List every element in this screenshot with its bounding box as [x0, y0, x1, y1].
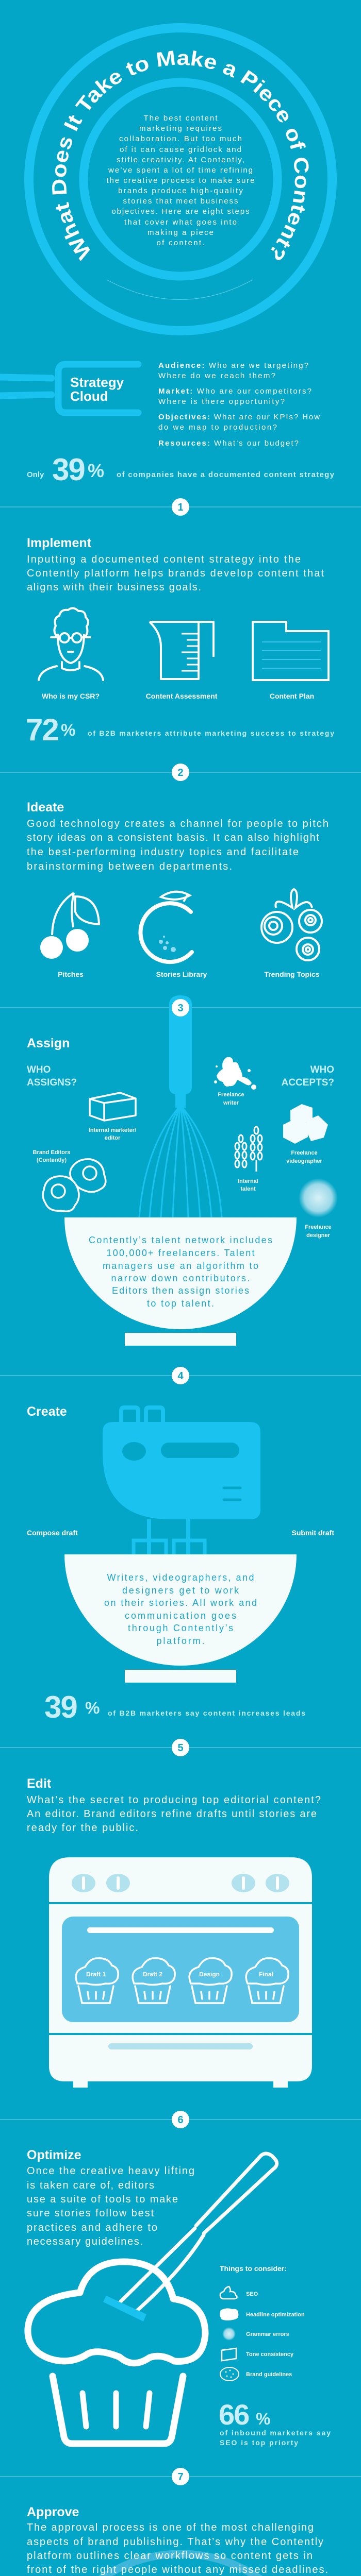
strategy questions: [158, 361, 320, 448]
icon: eggs (Brand Editors): (Contently): [37, 1157, 67, 1163]
ideate labels: [58, 970, 320, 978]
ideate labels: Stories Library: [156, 970, 207, 978]
create labels: Compose draft: [27, 1529, 78, 1537]
strategy questions: Market: Who are our competitors?: [158, 387, 311, 396]
strategy questions: Audience: Who are we targeting?: [158, 361, 308, 370]
intro text: stifle creativity. At Contently,: [117, 156, 244, 164]
ideate body: the best-performing industry topics and facilitate: [27, 846, 299, 858]
title rings: [29, 28, 332, 331]
stat: 39% leads: 39: [44, 1690, 77, 1724]
things to consider list: SEO: [246, 2291, 258, 2297]
stat: 72%: 72: [26, 713, 58, 747]
approve body: [27, 2522, 328, 2575]
strategy questions: do we map to production?: [158, 423, 277, 432]
approve body: aspects of brand publishing. That’s why the Contently: [27, 2536, 323, 2548]
step 6 marker: [0, 2111, 361, 2128]
whisk: [139, 995, 222, 1217]
text: Draft 2: [143, 1971, 162, 1978]
stat: 66%: %: [256, 2410, 270, 2428]
intro text: marketing requires: [139, 124, 222, 133]
text: Internal: [238, 1178, 258, 1184]
bowl: create: Writers, videographers, and: [107, 1572, 254, 1583]
bowl: talent network: to top talent.: [147, 1298, 214, 1309]
implement labels: Content Assessment: [146, 692, 218, 700]
step 1 marker: 1: [177, 502, 184, 513]
ideate body: brainstorming between departments.: [27, 861, 232, 872]
bowl: create: designers get to work: [122, 1585, 239, 1596]
create labels: [27, 1529, 334, 1537]
bowl: talent network: 100,000+ freelancers. Talent: [106, 1248, 255, 1258]
icon: splash (Freelance writer): [214, 1057, 256, 1090]
strategy cloud box: [0, 364, 138, 413]
heading: Edit: Edit: [27, 1776, 52, 1791]
edit body: ready for the public.: [27, 1822, 138, 1834]
step 7 marker: [0, 2468, 361, 2485]
icon: blueberries (Trending Topics): [261, 889, 322, 960]
approve body: front of the right people without any missed deadlines.: [27, 2564, 328, 2575]
step 4 marker: 4: [177, 1370, 184, 1382]
things to consider list: Tone consistency: [246, 2351, 294, 2358]
strategy cloud box: Cloud: [70, 388, 108, 404]
implement body: [27, 554, 324, 593]
icon: cherries (Pitches): [40, 893, 99, 959]
icon: sugar cubes (Freelance videographer): [283, 1104, 328, 1144]
step 2 marker: 2: [177, 767, 184, 778]
strategy cloud box: Strategy: [70, 375, 124, 390]
strategy questions: Objectives: What are our KPIs? How: [158, 413, 320, 421]
intro text: that cover what goes into: [124, 218, 237, 227]
optimize body: necessary guidelines.: [27, 2236, 143, 2247]
stat: 39% documented strategy: of companies have a documented content strategy: [117, 470, 335, 479]
intro text: collaboration. But too much: [119, 134, 242, 143]
step 4 marker: [0, 1367, 361, 1384]
stat: 39% documented strategy: [27, 452, 335, 487]
strategy questions: Resources: What’s our budget?: [158, 439, 299, 448]
bowl: create: communication goes: [125, 1611, 236, 1621]
icon: person (Who is my CSR?): [39, 608, 103, 680]
optimize body: [27, 2165, 194, 2247]
icon: wheat (Internal talent): [235, 1127, 262, 1172]
who assigns: ASSIGNS?: [27, 1077, 77, 1088]
stat: 66%: SEO is top priorty: [220, 2438, 298, 2447]
bowl: talent network: [64, 1217, 297, 1346]
heading: Approve: Approve: [27, 2505, 79, 2519]
approval rings: [42, 2554, 319, 2576]
who assigns: WHO: [27, 1064, 51, 1075]
text: Design: [199, 1971, 220, 1978]
text: Draft 1: [86, 1971, 106, 1978]
implement labels: Content Plan: [270, 692, 314, 700]
things to consider list: Brand guidelines: [246, 2371, 292, 2378]
who accepts: ACCEPTS?: [282, 1077, 334, 1088]
strategy questions: Where is there opportunity?: [158, 397, 285, 406]
icon: flour (Freelance designer): designer: [306, 1232, 331, 1239]
create labels: Submit draft: [292, 1529, 334, 1537]
text: Freelance: [218, 1092, 244, 1098]
step 6 marker: 6: [177, 2114, 184, 2126]
implement body: Contently platform helps brands develop content that: [27, 568, 324, 579]
text: Freelance: [291, 1150, 318, 1156]
stat: 72%: %: [61, 721, 75, 739]
intro text: [106, 114, 255, 247]
icon: eggs (Brand Editors): [33, 1149, 106, 1211]
step 7 marker: 7: [177, 2471, 184, 2483]
oven: [49, 1857, 312, 2088]
edit body: An editor. Brand editors refine drafts until stories are: [27, 1808, 317, 1820]
stat: 39% documented strategy: Only: [27, 470, 44, 479]
step 3 marker: [172, 999, 189, 1016]
who accepts: WHO: [310, 1064, 334, 1075]
ideate labels: Pitches: [58, 970, 84, 978]
heading: Optimize: Optimize: [27, 2148, 81, 2162]
heading: Implement: Implement: [27, 536, 92, 550]
icon: eggs (Brand Editors): Brand Editors: [33, 1149, 70, 1156]
text: editor: [105, 1135, 121, 1141]
intro text: objectives. Here are eight steps: [111, 207, 250, 216]
optimize body: use a suite of tools to make: [27, 2194, 178, 2205]
oven muffins: [76, 1958, 288, 2003]
text: Final: [259, 1971, 273, 1978]
things to consider list: Grammar errors: [246, 2331, 289, 2337]
bowl: talent network: narrow down contributors.: [111, 1273, 250, 1283]
ideate body: [27, 818, 329, 872]
optimize body: practices and adhere to: [27, 2222, 157, 2233]
bowl: create: on their stories. All work and: [104, 1598, 257, 1608]
stat: 39% documented strategy: %: [88, 460, 104, 481]
step 3 line: [0, 1007, 361, 1008]
optimize body: is taken care of, editors: [27, 2180, 154, 2191]
who assigns: [27, 1064, 77, 1088]
implement labels: [42, 692, 314, 700]
ideate body: Good technology creates a channel for people to pitch: [27, 818, 329, 829]
ideate labels: Trending Topics: [264, 970, 320, 978]
intro text: the creative process to make sure: [106, 176, 255, 185]
approve body: platform outlines clear workflows so content gets in: [27, 2550, 313, 2562]
icon: flour (Freelance designer): Freelance: [305, 1224, 332, 1230]
bowl: create: [64, 1554, 297, 1683]
optimize body: Once the creative heavy lifting: [27, 2165, 194, 2177]
stat: 72%: [26, 713, 334, 747]
things to consider list: Headline optimization: [246, 2312, 305, 2318]
stat: 72%: of B2B marketers attribute marketing success to strategy: [88, 729, 334, 737]
edit body: What’s the secret to producing top editorial content?: [27, 1794, 321, 1806]
icon: butter (Internal marketer/editor): [90, 1093, 136, 1121]
optimize body: sure stories follow best: [27, 2208, 154, 2219]
text: videographer: [286, 1158, 323, 1164]
text: Internal marketer/: [89, 1127, 136, 1133]
intro text: The best content: [143, 114, 218, 123]
implement body: Inputting a documented content strategy into the: [27, 554, 301, 565]
title: curved text: What Does It Take to Make a Piece of Content?: [52, 50, 309, 261]
stat: 66%: 66: [219, 2398, 249, 2431]
edit body: [27, 1794, 321, 1834]
mixer: [103, 1408, 260, 1554]
implement body: aligns with their business goals.: [27, 582, 201, 593]
strategy questions: Where do we reach them?: [158, 371, 275, 380]
bowl: talent network: managers use an algorithm to: [103, 1261, 258, 1271]
bowl: talent network: Contently’s talent network includes: [89, 1235, 272, 1245]
stat: 39% leads: %: [85, 1699, 100, 1717]
icon: folder (Content Plan): [253, 622, 329, 680]
step 2 marker: [0, 764, 361, 781]
step 3 marker: 3: [177, 1003, 184, 1014]
icon: flour (Freelance designer): [299, 1178, 338, 1239]
intro text: of content.: [157, 239, 204, 247]
big muffin with spatula: [28, 2154, 277, 2444]
heading: Assign: Assign: [27, 1036, 70, 1050]
stat: 66%: of inbound marketers say: [220, 2429, 331, 2437]
stat: 39% leads: [44, 1690, 305, 1724]
approve body: The approval process is one of the most challenging: [27, 2522, 314, 2533]
bowl: create: platform.: [157, 1636, 204, 1646]
stat: 39% documented strategy: 39: [52, 452, 85, 487]
icon: measuring jug (Content Assessment): [150, 622, 214, 679]
intro text: making a piece: [147, 228, 214, 237]
ideate body: story ideas on a consistent basis. It can also highlight: [27, 832, 319, 843]
things to consider list: Things to consider:: [220, 2264, 287, 2273]
step 5 marker: [0, 1739, 361, 1756]
text: talent: [240, 1186, 256, 1192]
intro text: stories that meet business: [123, 197, 238, 206]
intro text: we’ve spent a lot of time refining: [108, 166, 253, 175]
icon: apple (Stories Library): [140, 892, 192, 962]
intro text: brands produce high-quality: [118, 187, 243, 195]
heading: Create: Create: [27, 1404, 67, 1419]
step 5 marker: 5: [177, 1742, 184, 1754]
text: writer: [223, 1100, 239, 1106]
who accepts: [282, 1064, 334, 1088]
things to consider list: [220, 2264, 305, 2381]
bowl: create: through Contently’s: [128, 1623, 233, 1633]
bowl: talent network: Editors then assign stories: [112, 1285, 249, 1296]
stat: 39% leads: of B2B marketers say content increases leads: [108, 1709, 305, 1717]
stat: 66%: [219, 2398, 331, 2447]
step 1 marker: [0, 498, 361, 516]
heading: Ideate: Ideate: [27, 800, 64, 815]
intro text: of it can cause gridlock and: [120, 145, 241, 154]
implement labels: Who is my CSR?: [42, 692, 100, 700]
